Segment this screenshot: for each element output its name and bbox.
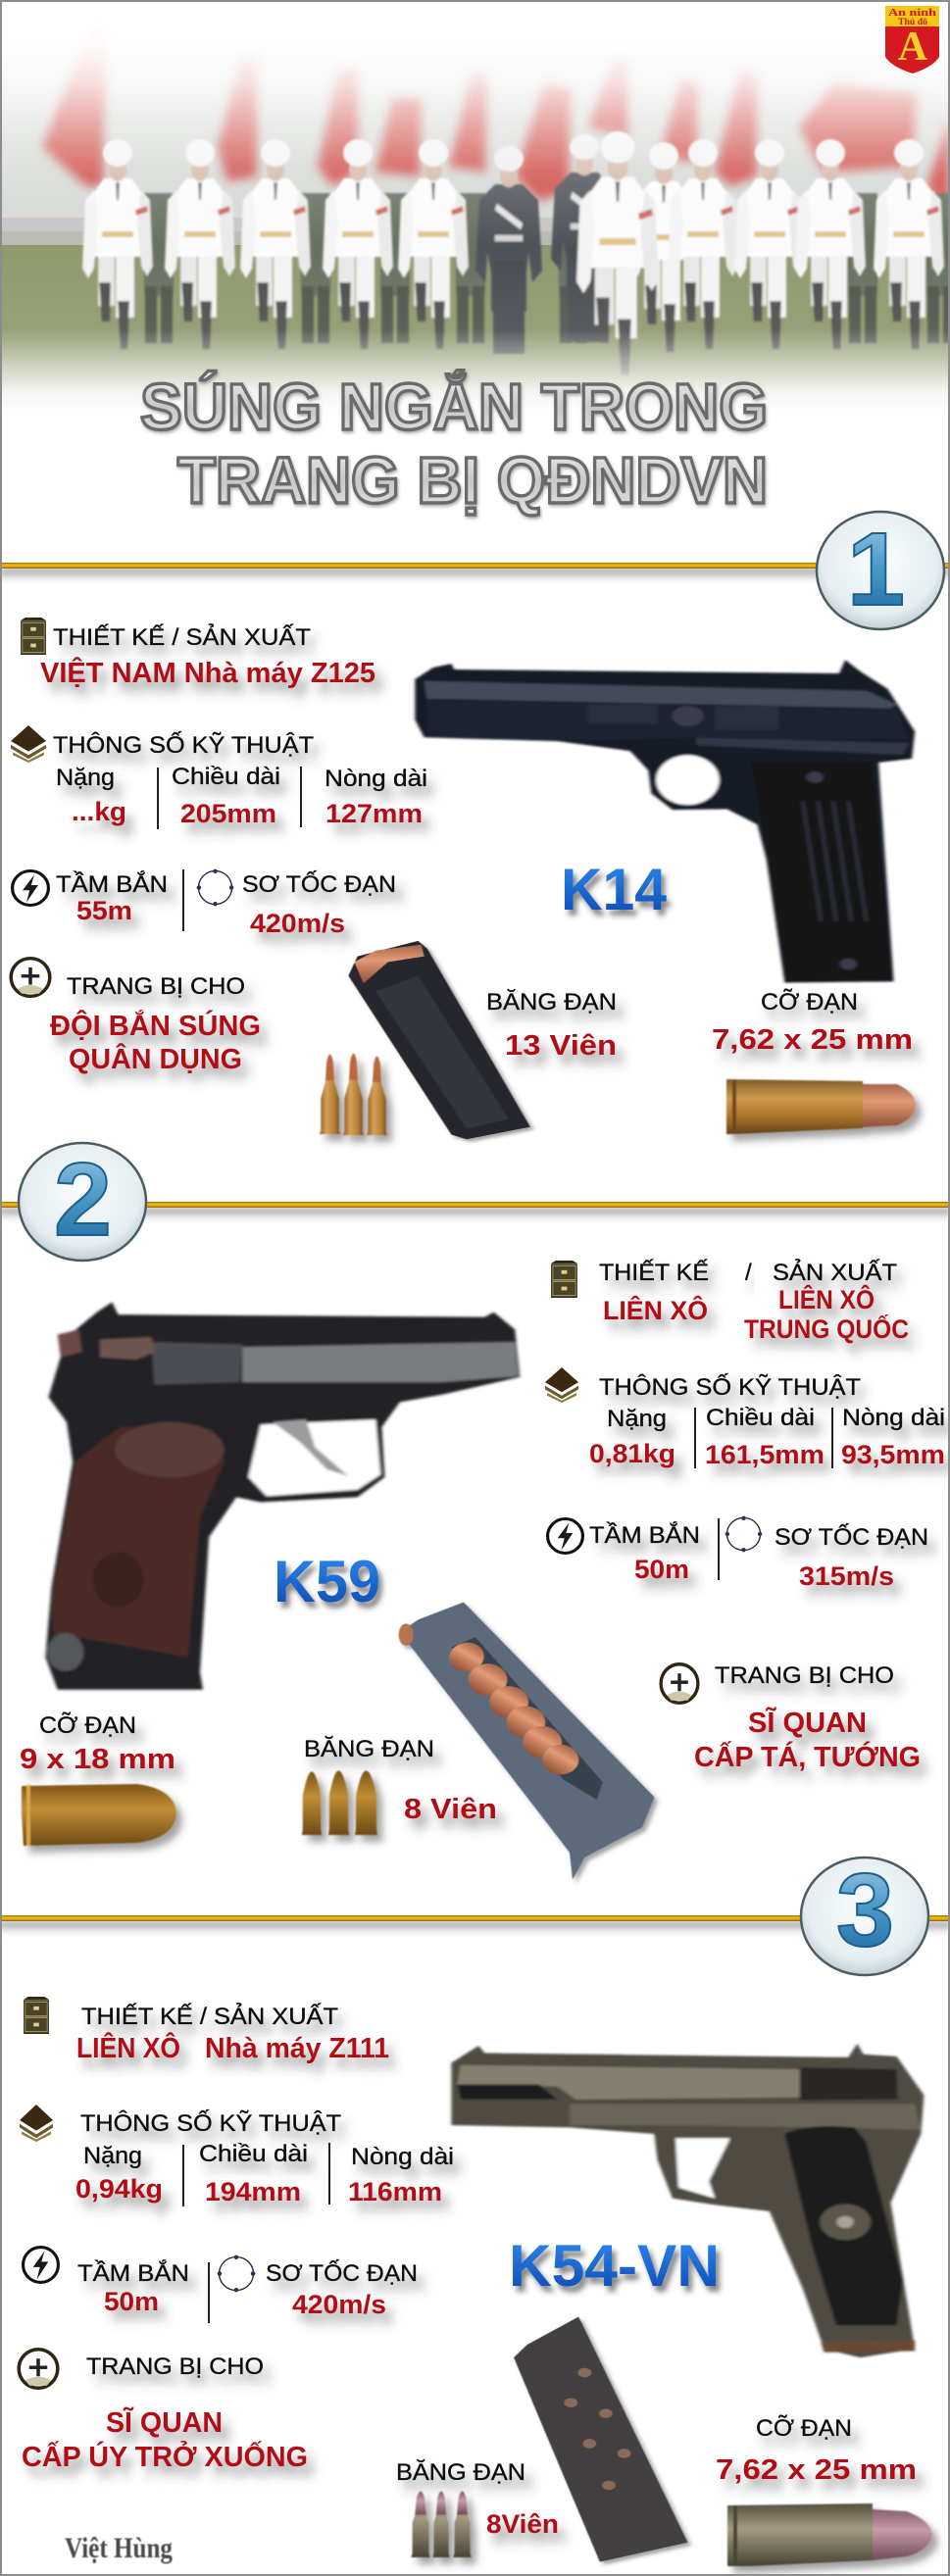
number badge 1 (817, 512, 944, 629)
spec: length: Chiều dài (199, 2141, 308, 2167)
design heading (599, 1258, 897, 1286)
design heading: SẢN XUẤT (773, 1258, 897, 1286)
spec: length (705, 1405, 825, 1469)
specs heading: THÔNG SỐ KỸ THUẬT (599, 1373, 861, 1401)
pistol photo K54 (451, 2044, 924, 2357)
magazine capacity: BĂNG ĐẠN (396, 2459, 525, 2486)
caliber: CỠ ĐẠN (761, 988, 858, 1016)
design heading: THIẾT KẾ / SẢN XUẤT (81, 2002, 338, 2030)
icon: bolt (548, 1519, 582, 1553)
icon: orbit (197, 869, 233, 906)
specs heading: THÔNG SỐ KỸ THUẬT (80, 2109, 341, 2137)
spec: length: Chiều dài (706, 1405, 815, 1431)
issued to: ĐỘI BẮN SÚNG (50, 1009, 261, 1042)
spec: barrel: 93,5mm (841, 1440, 945, 1469)
magazine photo (348, 941, 530, 1139)
spec: length: 205mm (180, 799, 276, 828)
magazine capacity: 8 Viên (404, 1794, 497, 1825)
design heading: / (745, 1260, 752, 1286)
cartridge close-up (726, 1079, 916, 1134)
panel: K59 pistol (0, 1142, 950, 1880)
design heading: THIẾT KẾ (599, 1259, 709, 1286)
spec: weight: 0,94kg (75, 2174, 163, 2204)
caliber: 7,62 x 25 mm (712, 1024, 913, 1056)
spec: length: Chiều dài (172, 764, 280, 790)
front rank (82, 131, 944, 374)
spec: weight: Nặng (607, 1406, 667, 1432)
caliber (716, 2414, 917, 2486)
icon: plus (661, 1664, 698, 1703)
spec: weight: ...kg (72, 797, 126, 826)
spec: weight (589, 1406, 675, 1468)
muzzle velocity (775, 1523, 928, 1591)
spec: barrel (841, 1405, 945, 1469)
issued to (694, 1662, 921, 1773)
three cartridges (302, 1770, 377, 1835)
origin (603, 1284, 909, 1344)
caliber (712, 988, 913, 1056)
spec: length (199, 2141, 308, 2206)
issued to: TRANG BỊ CHO (715, 1662, 894, 1689)
magazine capacity: 8Viên (486, 2509, 559, 2539)
icon: bolt (13, 871, 48, 905)
design heading: THIẾT KẾ / SẢN XUẤT (53, 622, 311, 651)
logo: An ninh Thủ đô: An ninh (888, 8, 937, 19)
section divider 2 (0, 1202, 950, 1220)
rear rank (144, 193, 950, 343)
model name: K14 (561, 857, 668, 922)
origin: LIÊN XÔ (603, 1295, 708, 1325)
spec: barrel: Nòng dài (842, 1405, 945, 1431)
icon: plus (11, 959, 50, 996)
icon: bolt (24, 2248, 58, 2282)
title (140, 371, 768, 518)
range (56, 870, 168, 925)
three cartridges (320, 1054, 387, 1135)
range: TẦM BẮN (77, 2259, 189, 2287)
muzzle velocity: SƠ TỐC ĐẠN (242, 870, 396, 898)
magazine capacity (304, 1736, 497, 1825)
muzzle velocity: SƠ TỐC ĐẠN (266, 2259, 418, 2287)
issued to (50, 973, 261, 1075)
pistol photo K14 (415, 660, 915, 983)
logo: An ninh Thủ đô: A (898, 25, 928, 70)
magazine capacity (486, 989, 617, 1062)
magazine photo (514, 2316, 687, 2562)
icon: plus (19, 2350, 58, 2388)
spec: barrel: Nòng dài (351, 2144, 454, 2170)
model name: K59 (274, 1549, 380, 1614)
spec: barrel (348, 2144, 454, 2206)
number badge 3 (801, 1853, 928, 1975)
magazine capacity: BĂNG ĐẠN (304, 1736, 434, 1762)
header photo: honor guard parade (0, 0, 950, 412)
origin: Nhà máy Z111 (205, 2033, 389, 2064)
range: 55m (76, 896, 132, 925)
origin: VIỆT NAM Nhà máy Z125 (40, 656, 375, 689)
panel: K54-VN pistol (0, 1853, 950, 2566)
panel: K14 pistol (0, 512, 950, 1139)
spec: barrel (325, 766, 427, 828)
issued to: QUÂN DỤNG (69, 1042, 242, 1075)
range (589, 1521, 700, 1584)
number badge 3: 3 (836, 1853, 894, 1968)
spec: weight: Nặng (83, 2143, 142, 2169)
icon: cabinet (551, 1261, 577, 1298)
magazine capacity: 13 Viên (505, 1030, 617, 1062)
spec: length: 194mm (205, 2177, 301, 2206)
caliber: 7,62 x 25 mm (716, 2454, 917, 2486)
section divider 3 (0, 1915, 950, 1934)
magazine capacity: BĂNG ĐẠN (486, 989, 617, 1016)
number badge 1: 1 (847, 512, 905, 627)
issued to: TRANG BỊ CHO (86, 2353, 264, 2380)
magazine capacity (396, 2459, 559, 2539)
range: 50m (104, 2287, 159, 2316)
logo: An ninh Thủ đô: Thủ đô (898, 17, 928, 26)
title: TRANG BỊ QĐNDVN (177, 444, 768, 518)
magazine photo (399, 1602, 654, 1880)
cartridge close-up (22, 1784, 176, 1846)
cartridge close-up (727, 2503, 932, 2566)
white fade overlay (0, 0, 950, 412)
issued to: CẤP TÁ, TƯỚNG (694, 1740, 921, 1773)
pistol photo K59 (45, 1302, 520, 1690)
muzzle velocity: SƠ TỐC ĐẠN (775, 1523, 928, 1551)
caliber: CỠ ĐẠN (39, 1711, 136, 1739)
icon: layers (11, 725, 46, 763)
icon: orbit (725, 1516, 762, 1552)
muzzle velocity: 420m/s (250, 909, 345, 938)
range: 50m (634, 1555, 689, 1584)
caliber: CỠ ĐẠN (756, 2414, 852, 2442)
spec: weight (56, 765, 126, 826)
caliber (20, 1711, 175, 1775)
issued to: SĨ QUAN (748, 1706, 867, 1739)
section divider 1 (0, 563, 950, 581)
origin: TRUNG QUỐC (744, 1313, 909, 1344)
caliber: 9 x 18 mm (20, 1744, 175, 1775)
icon: orbit (218, 2255, 255, 2292)
spec: length: 161,5mm (705, 1440, 825, 1469)
logo: An ninh Thủ đô (885, 6, 939, 74)
range: TẦM BẮN (589, 1521, 700, 1549)
stadium backdrop (2, 39, 948, 412)
spec: weight (75, 2143, 163, 2204)
specs heading: THÔNG SỐ KỸ THUẬT (53, 731, 314, 759)
icon: cabinet (21, 618, 46, 655)
icon: layers (545, 1367, 578, 1403)
model name: K54-VN (509, 2233, 720, 2299)
spec: weight: 0,81kg (589, 1439, 675, 1468)
spec: length (172, 764, 280, 828)
red flags (42, 20, 950, 216)
author credit: Việt Hùng (65, 2532, 173, 2564)
issued to: CẤP ÚY TRỞ XUỐNG (22, 2440, 308, 2473)
title: SÚNG NGẮN TRONG (140, 371, 768, 444)
spec: weight: Nặng (56, 765, 115, 791)
icon: cabinet (24, 1997, 49, 2034)
range (77, 2259, 189, 2316)
spec: barrel: 127mm (325, 799, 423, 828)
number badge 2: 2 (54, 1142, 112, 1258)
range: TẦM BẮN (56, 870, 168, 898)
muzzle velocity: 315m/s (799, 1561, 894, 1591)
issued to (22, 2353, 308, 2473)
origin: LIÊN XÔ (76, 2031, 180, 2064)
number badge 2 (19, 1142, 146, 1261)
spec: barrel: Nòng dài (325, 766, 427, 792)
icon: layers (20, 2105, 53, 2142)
three cartridges (411, 2492, 472, 2557)
issued to: TRANG BỊ CHO (67, 973, 245, 1000)
spec: barrel: 116mm (348, 2177, 442, 2206)
issued to: SĨ QUAN (106, 2405, 223, 2439)
muzzle velocity (266, 2259, 418, 2319)
origin: LIÊN XÔ (778, 1284, 875, 1314)
muzzle velocity (242, 870, 396, 938)
origin (76, 2031, 389, 2064)
muzzle velocity: 420m/s (292, 2290, 386, 2319)
